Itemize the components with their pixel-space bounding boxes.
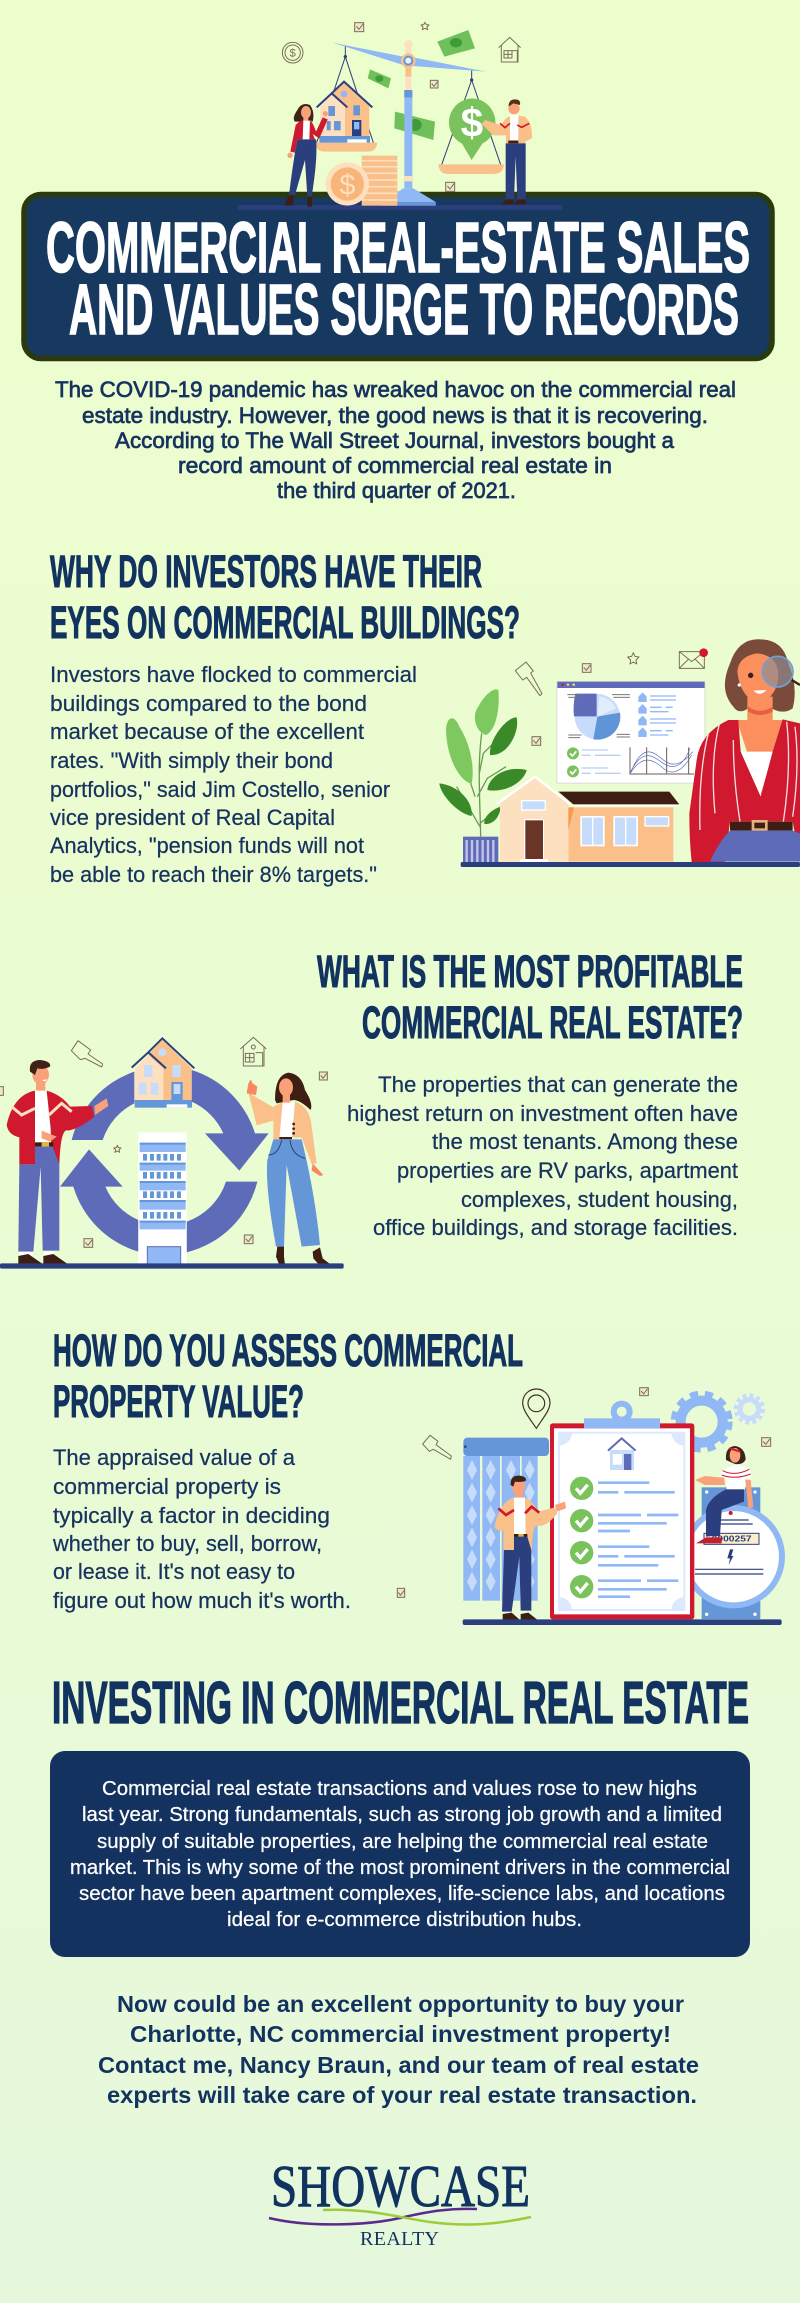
title banner [24, 194, 772, 358]
section 1 text: market because of the excellent [50, 719, 364, 744]
section 3 text: or lease it. It's not easy to [53, 1559, 295, 1584]
section 2 text: The properties that can generate the [378, 1072, 738, 1097]
woman in tan jacket [247, 1073, 330, 1265]
section 1 heading: WHY DO INVESTORS HAVE THEIR [50, 546, 482, 597]
section 4 panel: last year. Strong fundamentals, such as strong job growth and a limited [82, 1804, 722, 1826]
icon: banknotes [368, 30, 475, 140]
line chart [630, 747, 694, 774]
cycle arrows [60, 1070, 269, 1252]
intro paragraph: record amount of commercial real estate in [178, 453, 612, 478]
closing call to action: experts will take care of your real estate transaction. [107, 2082, 697, 2108]
dashboard window [557, 682, 705, 783]
logo: Showcase Realty [269, 2153, 531, 2250]
section 1 heading [50, 546, 520, 648]
intro paragraph: the third quarter of 2021. [277, 478, 516, 503]
section 2 text: properties are RV parks, apartment [397, 1158, 738, 1183]
section 1 text: Investors have flocked to commercial [50, 662, 417, 687]
logo: Showcase Realty: REALTY [360, 2228, 439, 2250]
ground line [463, 1619, 782, 1625]
scale pans and ropes [315, 47, 504, 174]
house [132, 1038, 194, 1108]
gears [674, 1394, 763, 1449]
section 3 heading: PROPERTY VALUE? [53, 1376, 304, 1427]
icon: dollar location pin: $ [461, 100, 484, 146]
clipboard checklist [550, 1401, 694, 1619]
title text [46, 209, 750, 350]
section 3 text: The appraised value of a [53, 1445, 296, 1470]
section 4 panel: ideal for e-commerce distribution hubs. [227, 1909, 582, 1931]
man with tan jacket [494, 1476, 566, 1620]
closing call to action: Charlotte, NC commercial investment property! [130, 2021, 671, 2047]
ground line [0, 1263, 344, 1269]
section 1 text [50, 662, 417, 887]
woman in red blazer [284, 104, 328, 207]
man in tan jacket [482, 99, 532, 204]
hero illustration: scale with house and money [238, 22, 562, 210]
section 3 text: commercial property is [53, 1474, 281, 1499]
logo: Showcase Realty: SHOWCASE [271, 2153, 530, 2219]
icon: checkboxes and outline icons: $ [290, 48, 297, 60]
section 2 text: office buildings, and storage facilities. [373, 1215, 738, 1240]
closing call to action [98, 1991, 699, 2108]
section 4 panel [50, 1751, 750, 1957]
plant in pot [439, 689, 527, 862]
section 2 text [347, 1072, 738, 1240]
scale post and beam [332, 40, 486, 206]
outline icons [0, 1037, 327, 1247]
intro paragraph: The COVID-19 pandemic has wreaked havoc on the commercial real [55, 377, 736, 402]
section 4 panel: sector have been apartment complexes, life-science labs, and locations [79, 1883, 725, 1905]
outline icons [515, 648, 708, 745]
office building [138, 1132, 187, 1264]
icon: house on pan [317, 82, 372, 143]
intro paragraph: estate industry. However, the good news is that it is recovering. [82, 403, 708, 428]
electric meter [682, 1487, 785, 1619]
section 2 text: complexes, student housing, [461, 1187, 738, 1212]
ground line [238, 205, 562, 210]
woman seated on meter [695, 1446, 753, 1543]
intro paragraph: According to The Wall Street Journal, investors bought a [115, 428, 675, 453]
closing call to action: Now could be an excellent opportunity to buy your [117, 1991, 684, 2017]
section 4 panel: Commercial real estate transactions and values rose to new highs [102, 1778, 697, 1800]
ground line [461, 862, 800, 867]
section 2 text: the most tenants. Among these [432, 1129, 738, 1154]
icon: coins: $ [339, 169, 355, 201]
section 1 illustration: house, dashboard and woman [439, 639, 800, 867]
electric meter: 0000257 [712, 1534, 752, 1544]
section 3 illustration: clipboard, wallpaper roll and meter [397, 1388, 785, 1625]
man in red jacket [7, 1060, 108, 1264]
wallpaper roll [463, 1438, 549, 1601]
section 1 text: portfolios," said Jim Costello, senior [50, 777, 390, 802]
section 3 text: typically a factor in deciding [53, 1503, 330, 1528]
pie chart [574, 694, 620, 740]
icon: dollar location pin [449, 98, 495, 160]
section 3 text [52, 1445, 351, 1613]
section 3 text: whether to buy, sell, borrow, [52, 1531, 322, 1556]
section 1 text: be able to reach their 8% targets." [50, 862, 377, 887]
icon: coins [326, 156, 397, 206]
house [497, 777, 681, 862]
section 1 text: buildings compared to the bond [50, 691, 367, 716]
outline icons [397, 1388, 771, 1597]
section 2 illustration: cycle arrows, house, building and two people [0, 1037, 344, 1269]
section 3 text: figure out how much it's worth. [53, 1588, 351, 1613]
section 4 panel: market. This is why some of the most prominent drivers in the commercial [70, 1857, 730, 1879]
section 3 heading [53, 1325, 523, 1427]
section 2 heading [317, 946, 743, 1048]
section 1 text: vice president of Real Capital [50, 805, 335, 830]
intro paragraph [55, 377, 736, 503]
section 2 text: highest return on investment often have [347, 1101, 738, 1126]
section 1 text: rates. "With simply their bond [50, 748, 333, 773]
icon: checkboxes and outline icons [282, 22, 520, 191]
closing call to action: Contact me, Nancy Braun, and our team of real estate [98, 2052, 699, 2078]
section 1 text: Analytics, "pension funds will not [50, 833, 364, 858]
woman with magnifying glass [689, 639, 800, 862]
section 4 panel: supply of suitable properties, are helping the commercial real estate [97, 1831, 708, 1853]
